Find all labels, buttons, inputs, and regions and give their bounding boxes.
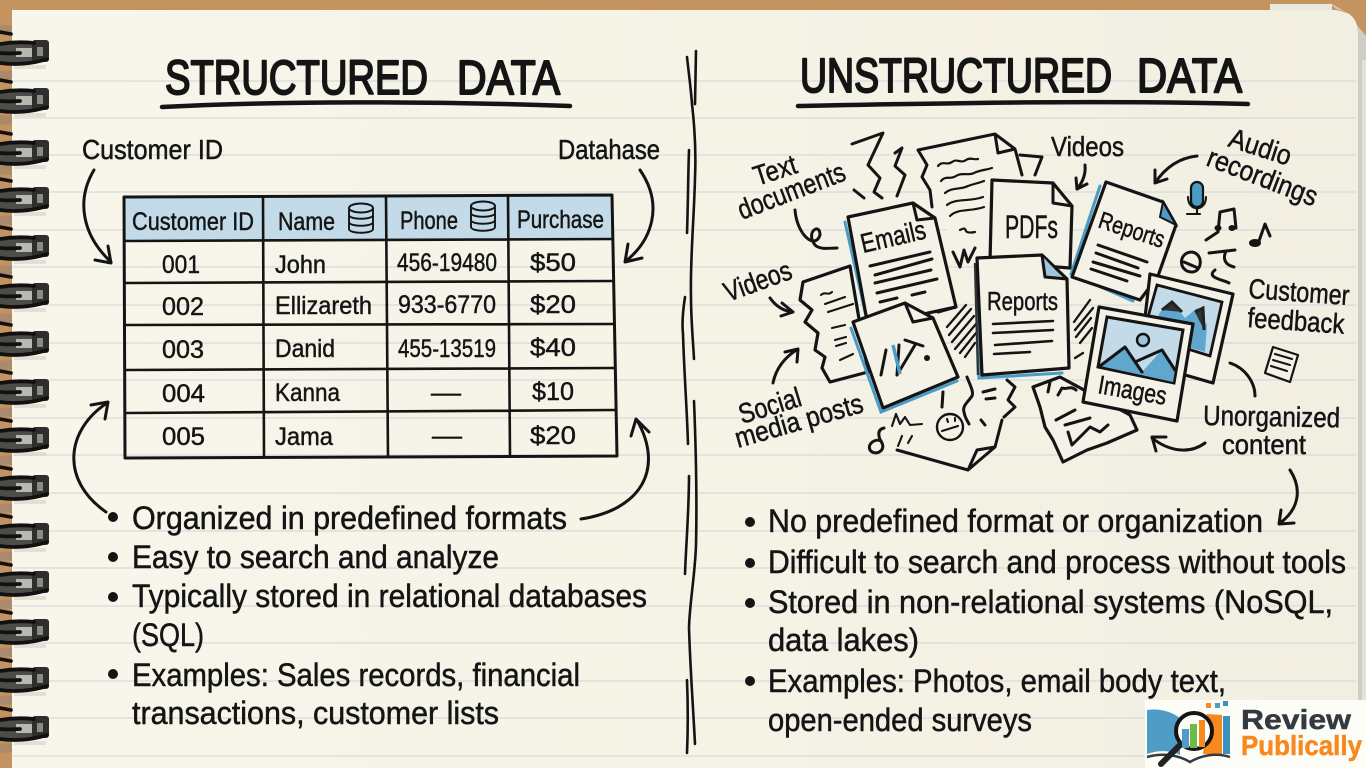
label: social media posts: Social — [735, 381, 805, 430]
label: customer feedback — [1247, 273, 1350, 340]
label: audio recordings: recordings — [1203, 142, 1322, 212]
squiggles near text documents — [852, 133, 1042, 198]
arrow: audio recordings — [1155, 156, 1197, 183]
label: database: Datahase — [558, 134, 660, 165]
arrow: videos left — [770, 298, 793, 316]
heading: structured data: STRUCTURED — [165, 52, 428, 105]
logo wordmark — [1241, 704, 1362, 761]
table rows: $20 — [530, 291, 576, 319]
bullet list: unstructured: data lakes) — [768, 622, 919, 658]
table header text: Purchase — [517, 206, 604, 234]
bullet list: unstructured: Examples: Photos, email body text, — [768, 663, 1226, 699]
scribble: zigzag — [953, 248, 975, 267]
arrow: customer id to table — [84, 170, 111, 263]
center divider — [683, 51, 696, 753]
table rows: $50 — [530, 249, 576, 277]
arrow: social media — [773, 349, 798, 383]
bullet list: unstructured: Stored in non-relational systems (NoSQL, — [768, 584, 1333, 620]
document: emails — [845, 203, 956, 326]
document: reports right: Reports — [1095, 207, 1168, 254]
table rows: 004 — [162, 380, 205, 408]
table rows: Ellizareth — [275, 292, 372, 320]
icon: small note — [1265, 347, 1298, 382]
table rows: 005 — [162, 423, 205, 451]
image: front polaroid — [1083, 307, 1193, 421]
heading: structured data: DATA — [457, 52, 560, 105]
label: text documents: documents — [733, 156, 850, 226]
labels around collage — [719, 122, 1350, 524]
icon: microphone — [1187, 182, 1206, 214]
hatching — [947, 300, 1093, 358]
icon: database phone — [471, 202, 495, 231]
spiral binding — [0, 32, 49, 745]
table rows: John — [275, 251, 326, 279]
label: audio recordings — [1203, 122, 1322, 212]
arrow: database to table — [625, 170, 653, 262]
bullet list: structured: Typically stored in relational databases — [132, 578, 647, 614]
table — [124, 195, 617, 458]
panel: structured data — [74, 52, 660, 731]
arrow: bullets to table right — [581, 419, 649, 519]
label: unorganized content — [1203, 400, 1340, 460]
table rows: — — [432, 422, 462, 450]
bullet list: structured: Examples: Sales records, financial — [132, 657, 580, 693]
label: unorganized content: content — [1222, 429, 1306, 460]
table rows: — — [431, 379, 461, 407]
table header row — [124, 195, 614, 241]
label: videos left: Videos — [719, 255, 796, 308]
table rows: 933-6770 — [398, 291, 496, 319]
arrow: unorganized upward curve — [1230, 363, 1255, 396]
table rows — [162, 249, 576, 451]
arrow: content to bullets — [1279, 470, 1297, 524]
table rows: 003 — [162, 336, 204, 364]
table header text: Name — [278, 208, 335, 236]
heading: unstructured data: DATA — [1137, 50, 1242, 103]
bullet list: structured: transactions, customer lists — [132, 695, 499, 731]
bullet list: unstructured: open-ended surveys — [768, 702, 1032, 738]
bullet list: structured: Organized in predefined formats — [132, 500, 567, 536]
bullet list: structured — [108, 500, 647, 731]
document: reports center — [975, 255, 1069, 378]
document: torn video note — [800, 266, 868, 382]
label: social media posts: media posts — [731, 388, 867, 454]
document: bottom torn note with smiley — [869, 377, 1015, 470]
document: pdfs — [990, 180, 1072, 268]
arrow: videos top — [1076, 165, 1087, 189]
table header text — [132, 206, 604, 236]
icon: database name — [349, 204, 373, 233]
arrow: bullets to table left — [74, 402, 108, 512]
image: back polaroid — [1140, 274, 1233, 383]
document: pdfs: PDFs — [1005, 209, 1058, 245]
document: bottom right torn note — [1033, 377, 1137, 462]
document: video sheet — [851, 303, 958, 412]
label: customer feedback: feedback — [1247, 302, 1346, 340]
bullet list: unstructured — [745, 503, 1346, 738]
panel: unstructured data — [719, 50, 1350, 738]
label: videos top: Videos — [1051, 131, 1124, 162]
bullet list: structured: Easy to search and analyze — [132, 539, 499, 575]
logo: review publically — [1145, 700, 1366, 768]
icon: book and magnifier — [1147, 701, 1230, 764]
table rows: $10 — [532, 378, 574, 406]
label: unorganized content: Unorganized — [1203, 400, 1340, 433]
table header text: Phone — [400, 207, 458, 235]
logo wordmark: Review — [1241, 704, 1351, 735]
document: reports right — [1071, 182, 1176, 301]
table rows: $20 — [530, 422, 576, 450]
bullet list: unstructured: Difficult to search and process without tools — [768, 544, 1346, 580]
table rows: 002 — [162, 293, 204, 321]
document: reports center: Reports — [987, 286, 1058, 316]
image: front polaroid: Images — [1096, 369, 1169, 411]
arrow: text documents curl — [795, 210, 837, 248]
document collage — [800, 133, 1298, 470]
bullet list: unstructured: No predefined format or organization — [768, 503, 1263, 539]
table rows: Kanna — [275, 379, 340, 407]
label: audio recordings: Audio — [1225, 122, 1296, 171]
table rows: 456-19480 — [397, 249, 497, 277]
arrow: content to pile — [1152, 437, 1205, 451]
document: emails: Emails — [858, 215, 929, 259]
label: customer id: Customer ID — [82, 134, 223, 165]
icon: music notes — [1206, 209, 1270, 247]
table rows: $40 — [530, 334, 576, 362]
bullet list: structured: (SQL) — [132, 617, 204, 653]
table rows: Danid — [275, 335, 335, 363]
table rows: Jama — [275, 423, 333, 451]
feedback scribbles — [1182, 250, 1235, 283]
back torn note — [918, 134, 1022, 270]
table rows: 455-13519 — [398, 335, 496, 363]
table rows: 001 — [162, 251, 200, 279]
table header text: Customer ID — [132, 208, 254, 236]
label: text documents: Text — [749, 149, 801, 192]
heading: unstructured data: UNSTRUCTURED — [800, 50, 1112, 103]
